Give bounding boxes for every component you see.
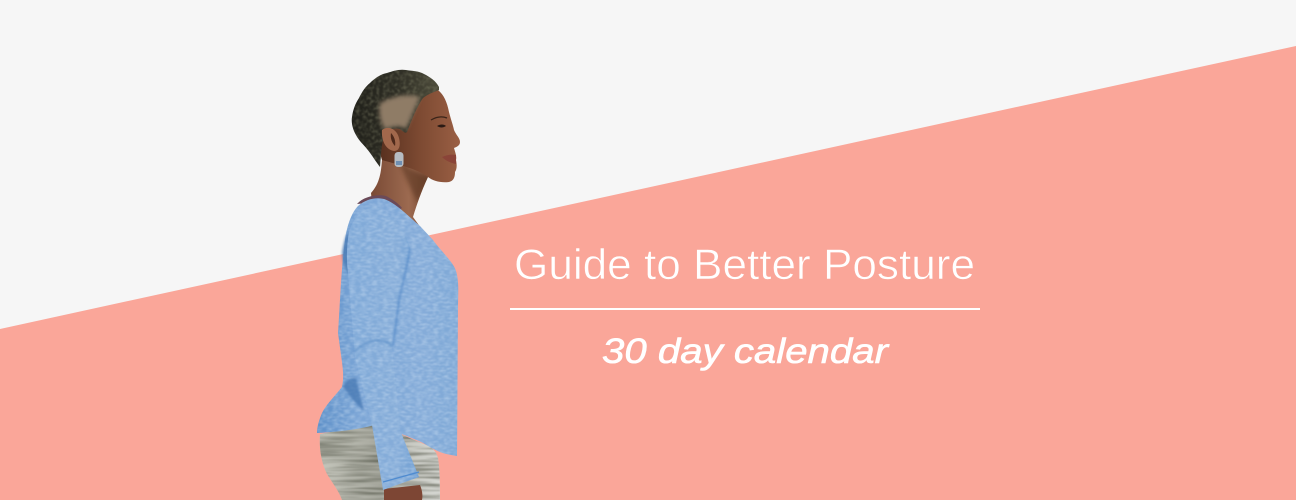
sleeve elbow crease xyxy=(354,340,392,352)
shirt body xyxy=(317,198,458,456)
hand xyxy=(384,485,422,500)
lips xyxy=(442,155,456,164)
figure: woman standing in profile xyxy=(317,70,460,500)
ear xyxy=(382,128,400,151)
neck xyxy=(371,130,440,228)
shirt shadow at back xyxy=(342,231,364,411)
sleeve cuff seam xyxy=(383,472,419,482)
divider rule xyxy=(510,308,980,310)
title: Guide to Better Posture xyxy=(514,241,975,289)
earring xyxy=(394,152,404,167)
inner ear xyxy=(391,133,395,146)
sleeve xyxy=(347,208,419,490)
earring shine xyxy=(396,161,402,165)
collar strap xyxy=(357,195,402,212)
hair xyxy=(352,70,439,167)
subtitle: 30 day calendar xyxy=(602,332,890,371)
eye xyxy=(437,124,446,128)
head and face xyxy=(380,90,460,182)
leggings xyxy=(320,424,440,500)
eyebrow xyxy=(431,117,447,120)
sleeve seam shadow xyxy=(393,248,410,345)
jaw shadow xyxy=(400,166,428,202)
shaved side of hair xyxy=(379,95,420,130)
